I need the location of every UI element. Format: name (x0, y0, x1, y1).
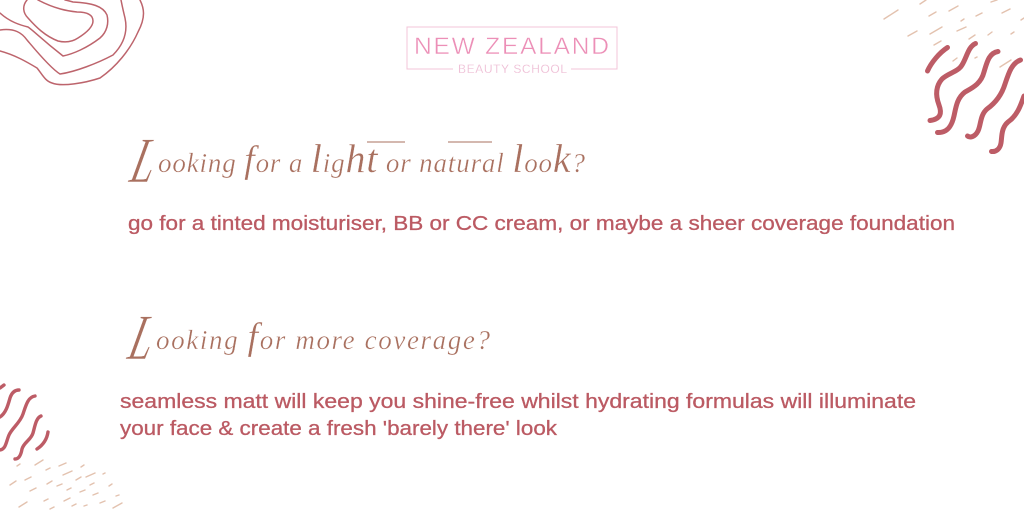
decoration: topographic contour lines, top left (0, 0, 144, 85)
decoration: wavy lines, bottom left (0, 385, 48, 459)
text: coverage advice: seamless matt will keep you shine-free whilst hydrating formulas will illuminate (120, 390, 916, 413)
text: light look advice: go for a tinted moisturiser, BB or CC cream, or maybe a sheer coverage foundation (128, 212, 955, 235)
logo: New Zealand Beauty School: BEAUTY SCHOOL (458, 62, 567, 76)
heading: light or natural look: ooking for a light or natural look? (158, 136, 586, 181)
decoration: wavy lines, top right (928, 44, 1024, 152)
logo: New Zealand Beauty School (407, 27, 617, 76)
heading: light or natural look: L (124, 125, 165, 196)
heading: light or natural look (124, 125, 585, 196)
heading: more coverage (122, 302, 490, 373)
heading: more coverage: ooking for more coverage? (156, 316, 490, 358)
text: coverage advice (120, 390, 916, 440)
decoration: dashes, bottom left (10, 460, 122, 509)
logo: New Zealand Beauty School: NEW ZEALAND (414, 33, 609, 60)
text: coverage advice: your face & create a fresh 'barely there' look (120, 417, 558, 440)
decoration: dashes, top right (884, 0, 1024, 67)
heading: more coverage: L (122, 302, 163, 373)
